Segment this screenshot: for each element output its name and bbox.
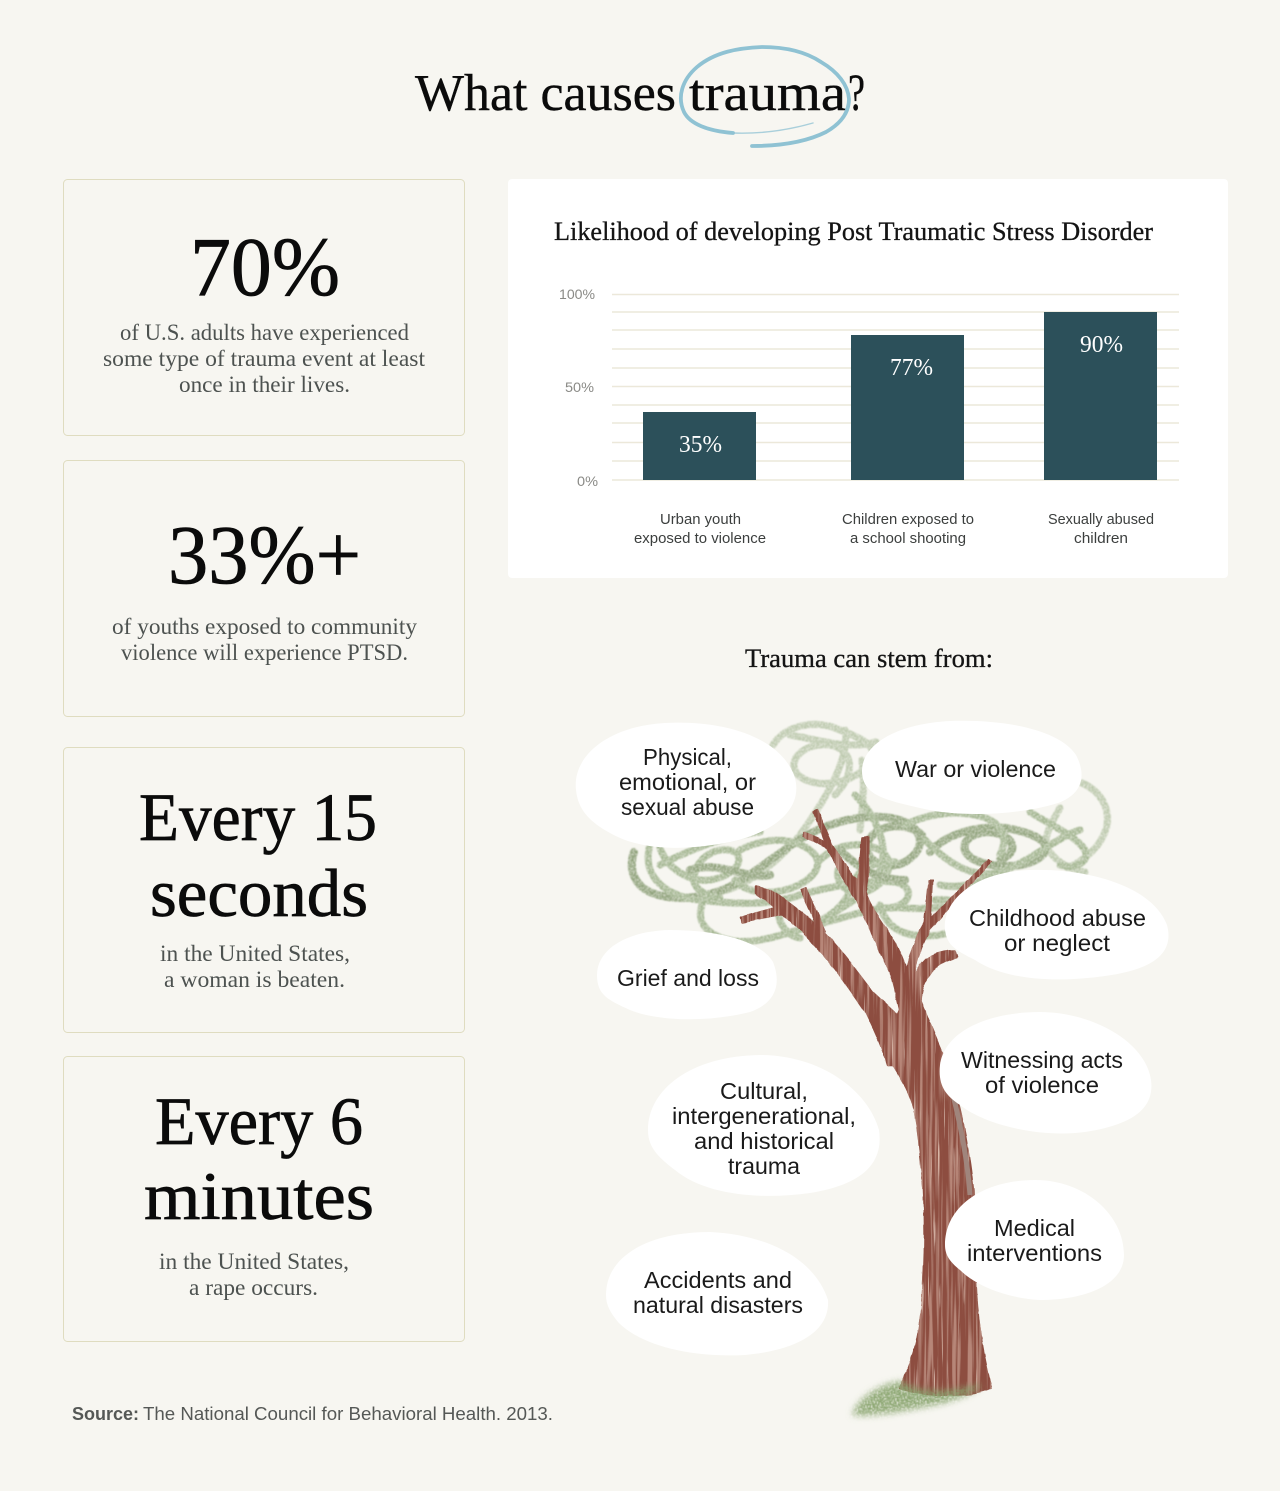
category labels: Urban youth — [660, 512, 741, 528]
bar: sexually abused 90% — [1044, 312, 1157, 480]
panel: every 15 seconds stat — [64, 748, 464, 1032]
stat: 70%: 70% — [190, 221, 340, 314]
source note: Source: — [72, 1404, 139, 1424]
bubble: cultural, intergenerational, and historical trauma: intergenerational, — [672, 1103, 856, 1129]
y axis labels — [559, 286, 598, 489]
stat: Every 6 minutes — [144, 1083, 374, 1234]
panel: every 6 minutes stat — [64, 1056, 464, 1342]
panel: 33%+ stat — [64, 460, 464, 716]
bar: sexually abused 90%: 90% — [1080, 332, 1123, 358]
text: 33%+ description: violence will experience PTSD. — [121, 640, 408, 665]
bubble: accidents and natural disasters: Accidents and — [644, 1267, 792, 1293]
category labels: exposed to violence — [634, 531, 766, 547]
bubble: childhood abuse or neglect: Childhood abuse — [969, 905, 1146, 931]
twig: left branch fork — [801, 888, 826, 932]
stat: Every 15 seconds — [139, 779, 377, 931]
middle branch — [803, 810, 914, 1020]
bar: urban youth 35% — [643, 412, 756, 480]
grass at tree base — [852, 1381, 982, 1416]
text: every 15 seconds description — [160, 941, 350, 992]
title: ? — [848, 65, 865, 122]
bubble: cultural, intergenerational, and historical trauma: Cultural, — [720, 1078, 808, 1104]
tree foliage scribbles — [632, 724, 1107, 941]
bubble: war or violence — [862, 721, 1082, 814]
stat: Every 15 seconds: seconds — [150, 855, 368, 931]
text: every 6 minutes description: in the United States, — [159, 1249, 349, 1274]
text: 70% description: of U.S. adults have experienced — [120, 320, 409, 345]
y axis labels: 50% — [565, 379, 594, 395]
text: every 15 seconds description: a woman is beaten. — [164, 967, 345, 992]
bubble: physical, emotional, or sexual abuse: sexual abuse — [621, 794, 754, 820]
category labels: a school shooting — [850, 531, 966, 547]
category labels: Sexually abused — [1048, 512, 1154, 528]
title: trauma — [689, 65, 846, 122]
icon: hand-drawn circle around trauma — [681, 47, 849, 146]
text: 33%+ description: of youths exposed to community — [112, 614, 418, 639]
stat: Every 6 minutes: minutes — [144, 1158, 374, 1234]
bubble: medical interventions — [945, 1180, 1124, 1300]
bubble: cultural, intergenerational, and historical trauma: and historical — [694, 1128, 834, 1154]
bar: school shooting 77% — [851, 335, 964, 480]
text: 70% description — [103, 320, 426, 397]
y axis labels: 100% — [559, 286, 595, 302]
lower right branch — [908, 951, 957, 1005]
bubble: witnessing acts of violence — [940, 1012, 1151, 1133]
bubble: witnessing acts of violence: of violence — [985, 1072, 1099, 1098]
title: What causes — [415, 65, 676, 122]
bar: school shooting 77%: 77% — [890, 355, 933, 381]
trunk — [888, 985, 991, 1395]
category labels — [634, 512, 1154, 547]
text: every 6 minutes description — [159, 1249, 349, 1300]
grey edge of trunk — [944, 1062, 970, 1195]
y axis labels: 0% — [577, 473, 598, 489]
stat: Every 15 seconds: Every 15 — [139, 779, 377, 855]
text: every 6 minutes description: a rape occurs. — [189, 1275, 318, 1300]
text: 33%+ description — [112, 614, 418, 665]
bubble: childhood abuse or neglect: or neglect — [1004, 930, 1111, 956]
bubble: medical interventions: Medical — [994, 1215, 1075, 1241]
bubble: childhood abuse or neglect — [945, 870, 1168, 979]
chart title: Likelihood of developing Post Traumatic Stress Disorder — [554, 217, 1153, 246]
bubble: physical, emotional, or sexual abuse — [576, 723, 796, 848]
text: 70% description: once in their lives. — [179, 372, 350, 397]
bubble: medical interventions: interventions — [967, 1240, 1102, 1266]
bubble: physical, emotional, or sexual abuse: emotional, or — [619, 769, 756, 795]
bubble: accidents and natural disasters: natural disasters — [633, 1292, 803, 1318]
text: every 15 seconds description: in the United States, — [160, 941, 350, 966]
heading: trauma can stem from: Trauma can stem from: — [745, 644, 993, 673]
source note: The National Council for Behavioral Health. 2013. — [143, 1404, 553, 1424]
stat: 33%+: 33%+ — [168, 509, 361, 602]
bubble: grief and loss: Grief and loss — [617, 965, 759, 991]
illustration: tree — [632, 724, 1107, 1416]
bubble: cultural, intergenerational, and historical trauma: trauma — [728, 1153, 800, 1179]
bubble: accidents and natural disasters — [606, 1232, 828, 1355]
tree trunk and branches — [741, 810, 992, 1395]
bubble: cultural, intergenerational, and historical trauma — [648, 1055, 880, 1196]
title — [415, 47, 865, 146]
panel: 70% stat — [64, 180, 464, 436]
category labels: Children exposed to — [842, 512, 974, 528]
bubble: witnessing acts of violence: Witnessing acts — [961, 1047, 1123, 1073]
bubble: war or violence: War or violence — [895, 756, 1056, 782]
right branches — [905, 859, 992, 990]
text: 70% description: some type of trauma event at least — [103, 346, 426, 371]
bubble: physical, emotional, or sexual abuse: Physical, — [643, 744, 732, 770]
stat: Every 6 minutes: Every 6 — [155, 1083, 363, 1159]
panel: PTSD chart — [508, 179, 1228, 578]
bubble: grief and loss — [597, 930, 777, 1019]
bar: urban youth 35%: 35% — [679, 432, 722, 458]
left branch — [741, 887, 902, 1065]
category labels: children — [1074, 531, 1128, 547]
